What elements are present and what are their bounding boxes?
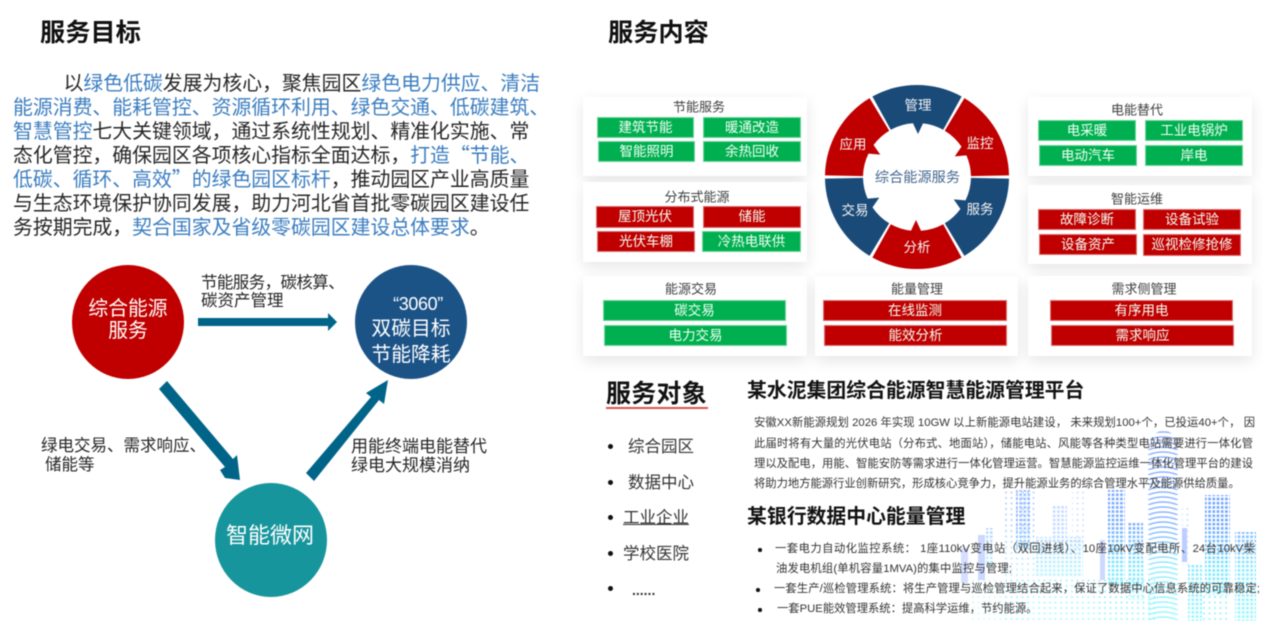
panel: 智能运维: 设备资产: [1061, 237, 1115, 252]
text block: service goals paragraph: 以绿色低碳发展为核心，聚焦园区绿色电力供应、清洁: [64, 67, 540, 96]
panel: 电能替代: 电采暖: [1067, 123, 1107, 138]
diagram: three-node triangle: 用能终端电能替代: [351, 437, 487, 456]
panel: 能源交易: 碳交易: [674, 303, 715, 318]
list: service targets: ......: [632, 582, 655, 598]
list: bank data center systems: 一套生产/巡检管理系统：将生产管理与巡检管理结合起来，保证了数据中心信息系统的可靠稳定;: [774, 583, 1260, 595]
diagram: three-node triangle: 储能等: [45, 456, 94, 474]
list: service targets: 学校医院: [623, 545, 689, 563]
node: 智能微网: [215, 483, 327, 597]
heading: 服务内容: 服务内容: [608, 19, 709, 47]
text block: cement group description: 此届时将有大量的光伏电站（分布式、地面站），储能电站、风能等各种类型电站需要进行一体化管: [754, 438, 1253, 450]
list: bank data center systems: [755, 542, 1260, 615]
node: 综合能源服务: [72, 265, 184, 379]
panel: 能源交易: 电力交易: [668, 328, 722, 343]
panel: 需求侧管理: 有序用电: [1114, 303, 1168, 318]
diagram: three-node triangle: 节能降耗: [371, 344, 451, 366]
panel: 分布式能源: 分布式能源: [664, 190, 730, 204]
text block: service goals paragraph: 务按期完成，契合国家及省级零碳园区建设总体要求。: [13, 211, 490, 240]
panel: 需求侧管理: 需求响应: [1116, 328, 1170, 343]
diagram: three-node triangle: 双碳目标: [371, 318, 451, 340]
list: bank data center systems: 一套电力自动化监控系统： 1座110kV变电站（双回进线）、10座10kV变配电所、24台10kV柴: [775, 543, 1255, 555]
panel: 节能服务: 余热回收: [725, 144, 779, 159]
text block: service goals paragraph: 能源消费、能耗管控、资源循环利用、绿色交通、低碳建筑、: [13, 91, 549, 120]
panel: 节能服务: [583, 97, 807, 176]
list: bank data center systems: 油发电机组(单机容量1MVA)的集中监控与管理;: [776, 563, 1012, 575]
panel: 能量管理: [815, 276, 1018, 356]
list: service targets: [607, 437, 694, 598]
heading: bank data center: 某银行数据中心能量管理: [747, 506, 965, 528]
heading: cement group platform: 某水泥集团综合能源智慧能源管理平台: [747, 380, 1084, 402]
panel: 能源交易: 能源交易: [665, 282, 717, 296]
diagram: three-node triangle: [41, 264, 488, 598]
text block: cement group description: 将助力地方能源行业创新研究，形成核心竞争力，提升能源业务的综合管理水平及能源供给质量。: [754, 478, 1240, 490]
text block: cement group description: [754, 416, 1255, 490]
panel: 能源交易: [583, 276, 807, 356]
panel: 能量管理: 在线监测: [888, 303, 942, 318]
panel: 智能运维: [1028, 185, 1252, 264]
diagram: three-node triangle: 服务: [108, 320, 148, 342]
node: 3060 双碳目标: [355, 265, 467, 379]
heading: 服务对象: 服务对象: [606, 380, 707, 408]
text block: service goals paragraph: 态化管控，确保园区各项核心指标全面达标，打造“节能、: [13, 139, 529, 168]
panel: 能量管理: 能量管理: [891, 282, 943, 296]
text block: service goals paragraph: 智慧管控七大关键领域，通过系统性规划、精准化实施、常: [13, 115, 529, 144]
text block: service goals paragraph: 与生态环境保护协同发展，助力河北省首批零碳园区建设任: [13, 187, 529, 216]
text block: cement group description: 安徽XX新能源规划 2026 年实现 10GW 以上新能源电站建设， 未来规划100+个，已投运40+个， 因: [754, 417, 1255, 429]
city dot-matrix background: [960, 430, 1257, 621]
chart: integrated energy service ring: 交易: [842, 202, 868, 218]
text block: service goals paragraph: [12, 67, 549, 240]
chart: integrated energy service ring: 分析: [904, 240, 930, 255]
panel: 节能服务: 暖通改造: [725, 120, 779, 135]
chart: integrated energy service ring: 综合能源服务: [875, 170, 960, 186]
panel: 分布式能源: 储能: [738, 209, 766, 224]
diagram: three-node triangle: 碳资产管理: [201, 292, 284, 310]
list: service targets: 综合园区: [628, 438, 694, 456]
diagram: three-node triangle: 综合能源: [88, 298, 168, 320]
diagram: three-node triangle: 智能微网: [226, 523, 314, 548]
panel: 电能替代: [1028, 97, 1252, 176]
heading: 服务目标: 服务目标: [40, 19, 141, 47]
diagram: three-node triangle: 绿电交易、需求响应、: [41, 437, 206, 455]
panel: 智能运维: 巡视检修抢修: [1152, 237, 1232, 252]
list: service targets: 工业企业: [623, 509, 689, 527]
text block: service goals paragraph: 低碳、循环、高效”的绿色园区标杆，推动园区产业高质量: [13, 163, 529, 192]
panel: 分布式能源: [583, 182, 807, 262]
panel: 电能替代: 电能替代: [1111, 102, 1163, 118]
chart: integrated energy service ring: 管理: [904, 98, 932, 113]
text block: cement group description: 理以及配电，用能、智能安防等需求进行一体化管理运营。智慧能源监控运维一体化管理平台的建设: [754, 458, 1253, 470]
panel: 需求侧管理: [1028, 276, 1252, 356]
chart: integrated energy service ring: 应用: [840, 136, 866, 152]
arrow labels: 节能服务，碳核算、: [201, 274, 344, 292]
panel: 节能服务: 建筑节能: [618, 120, 672, 135]
panel: 智能运维: 故障诊断: [1060, 212, 1114, 227]
diagram: three-node triangle: “3060”: [393, 294, 443, 314]
diagram: three-node triangle: 绿电大规模消纳: [351, 456, 470, 475]
panel: 节能服务: 智能照明: [620, 144, 674, 159]
panel: 智能运维: 设备试验: [1165, 212, 1219, 227]
chart: integrated energy service ring: 监控: [966, 136, 994, 151]
panel: 智能运维: 智能运维: [1111, 192, 1163, 206]
panel: 分布式能源: 屋顶光伏: [618, 209, 672, 224]
panel: 能量管理: 能效分析: [888, 328, 942, 343]
panel: 分布式能源: 冷热电联供: [718, 234, 785, 249]
panel: 节能服务: 节能服务: [673, 100, 725, 114]
panel: 电能替代: 岸电: [1180, 148, 1208, 163]
panel: 电能替代: 电动汽车: [1061, 148, 1115, 163]
arrows: [158, 312, 389, 482]
chart: integrated energy service ring: [824, 84, 1010, 270]
list: bank data center systems: 一套PUE能效管理系统：提高科学运维，节约能源。: [777, 603, 1037, 615]
list: service targets: 数据中心: [628, 474, 694, 492]
panel: 电能替代: 工业电锅炉: [1160, 123, 1228, 138]
panel: 分布式能源: 光伏车棚: [619, 234, 673, 249]
panel: 需求侧管理: 需求侧管理: [1111, 282, 1177, 296]
chart: integrated energy service ring: 服务: [966, 202, 994, 217]
